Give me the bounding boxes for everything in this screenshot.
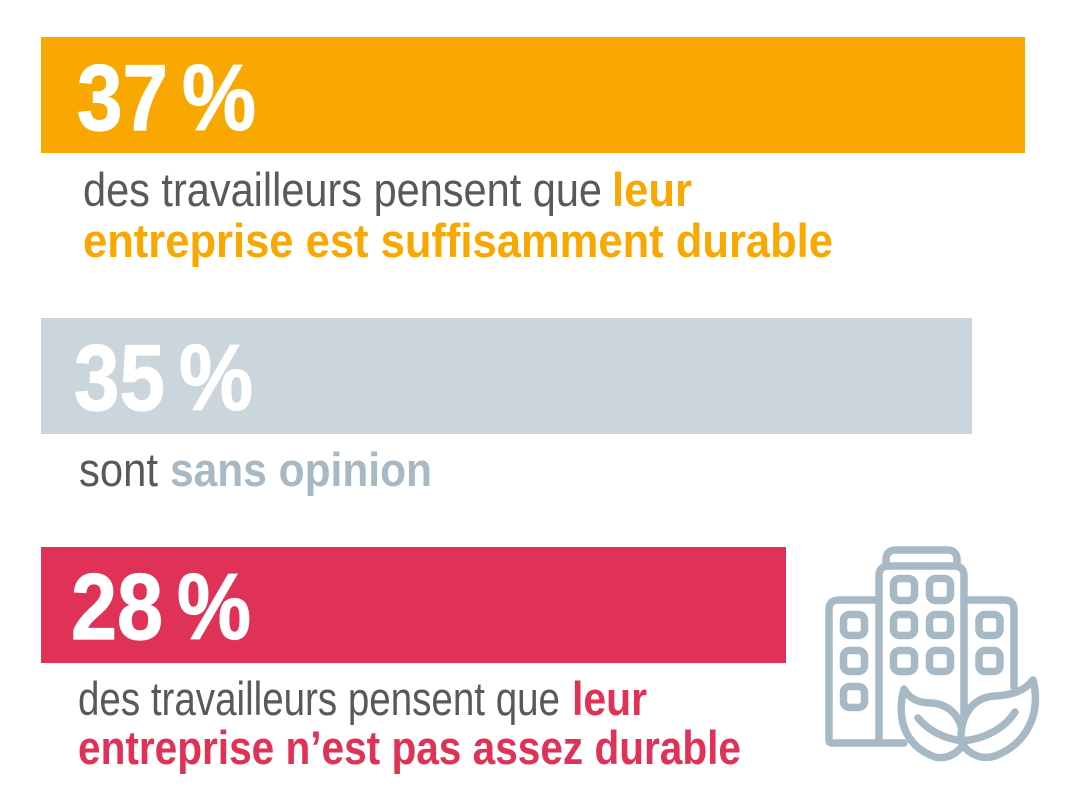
bar: 37 percent <box>41 37 1025 153</box>
panel: 37 percent <box>41 37 1025 267</box>
number: 35 percent <box>74 325 253 430</box>
text: no opinion <box>79 443 432 496</box>
text: no opinion: sont <box>79 443 158 496</box>
number: 28 percent <box>71 554 251 659</box>
text: not sustainable enough: entreprise n’est pas assez durable <box>78 721 741 774</box>
bar: 35 percent <box>41 318 972 434</box>
text: sufficiently sustainable: entreprise est suffisamment durable <box>83 214 833 267</box>
panel: 35 percent <box>41 318 972 496</box>
number: 35 percent: 35 <box>74 325 165 430</box>
number: 37 percent: 37 <box>77 45 168 150</box>
number: 35 percent: % <box>179 325 253 430</box>
number: 28 percent: % <box>177 554 251 659</box>
text: not sustainable enough <box>78 672 741 774</box>
text: sufficiently sustainable: des travailleurs pensent que <box>83 163 602 216</box>
bar: 28 percent <box>41 547 786 663</box>
panel: 28 percent <box>41 547 786 774</box>
text: sufficiently sustainable: leur <box>612 163 692 216</box>
number: 28 percent: 28 <box>71 554 163 659</box>
text: no opinion: sans opinion <box>170 443 432 496</box>
icon: building with leaves <box>829 550 1035 758</box>
text: not sustainable enough: des travailleurs pensent que <box>78 672 560 725</box>
text: not sustainable enough: leur <box>572 672 647 725</box>
text: sufficiently sustainable <box>83 163 833 267</box>
number: 37 percent <box>77 45 256 150</box>
number: 37 percent: % <box>182 45 256 150</box>
